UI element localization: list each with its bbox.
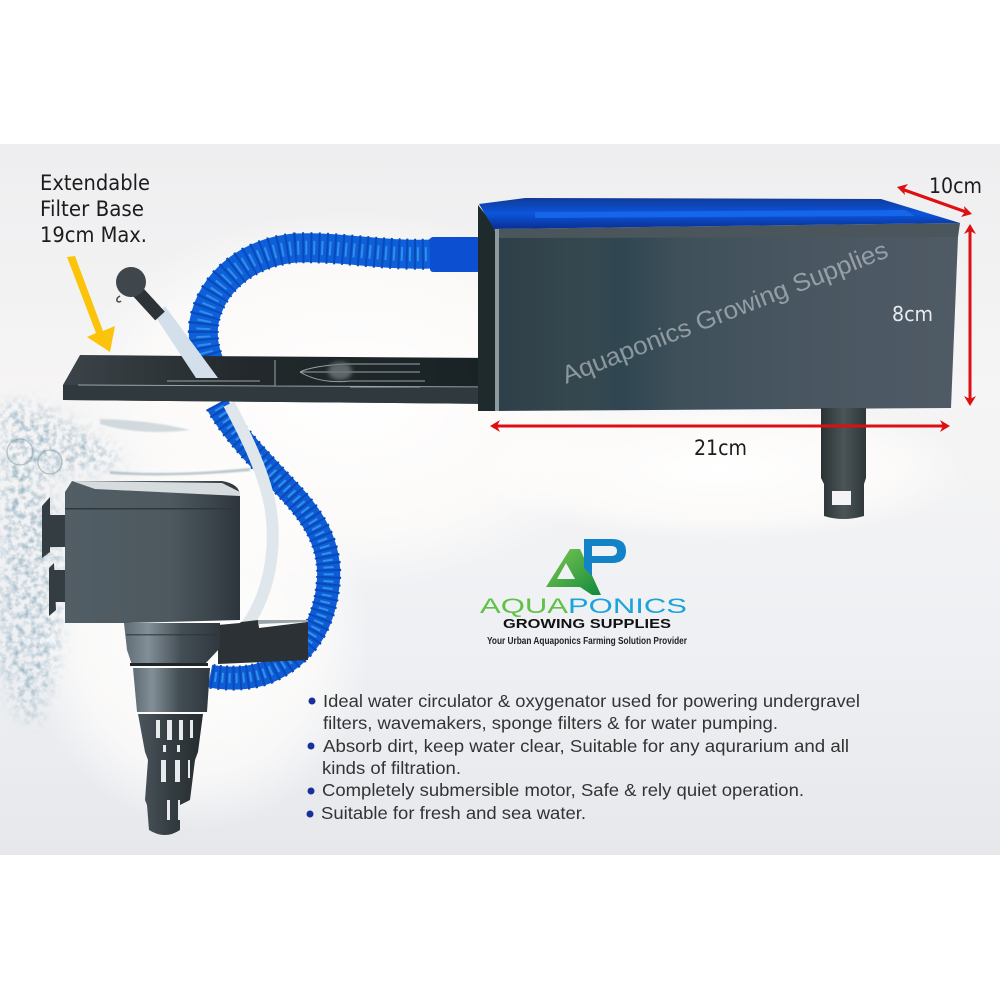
- hose connector: [430, 237, 480, 272]
- suction cups: [42, 497, 68, 616]
- pump body: [65, 481, 240, 623]
- bullet 2: kinds of filtration.: [322, 758, 461, 778]
- filter box: [478, 198, 960, 411]
- pump side outlet: [218, 620, 308, 664]
- pump collar: [133, 668, 210, 712]
- logo mark P: [584, 539, 626, 576]
- blue lid top: [479, 198, 960, 229]
- upper white air tube: [155, 306, 218, 378]
- outlet stem: [821, 408, 866, 519]
- background panel: [0, 144, 1000, 855]
- water splash and bubbles: [0, 404, 250, 725]
- bullet 1: Ideal water circulator & oxygenator used for powering undergravel: [323, 691, 860, 711]
- box lid rim: [494, 223, 960, 238]
- bullet 1: filters, wavemakers, sponge filters & for water pumping.: [323, 713, 778, 733]
- label: extendable filter base: 19cm Max.: [40, 223, 147, 247]
- lower white air tube: [229, 404, 273, 625]
- lower corrugated hose: [210, 404, 329, 678]
- logo: [480, 539, 687, 647]
- bullet 2: [308, 736, 849, 778]
- filter base tray: [63, 355, 500, 404]
- dimension arrow: height: [964, 224, 976, 406]
- dimension arrow: depth: [897, 184, 972, 217]
- submersible pump: [42, 481, 308, 835]
- label: extendable filter base: Filter Base: [40, 197, 144, 221]
- dimension: 21cm label: 21cm: [694, 436, 747, 460]
- dimension: 10cm label: 10cm: [929, 174, 982, 198]
- label: extendable filter base: [40, 171, 150, 247]
- logo mark A: [546, 549, 601, 595]
- box front face: [497, 237, 958, 411]
- bullet 2: Absorb dirt, keep water clear, Suitable for any aqurarium and all: [323, 736, 849, 756]
- dimension arrow: width: [490, 420, 950, 432]
- upper corrugated hose: [203, 248, 432, 376]
- air valve nozzle: [116, 267, 160, 316]
- box side wall: [478, 205, 497, 411]
- icon: yellow arrow: [67, 256, 115, 352]
- logo tagline: Your Urban Aquaponics Farming Solution Provider: [487, 636, 687, 647]
- pump neck: [124, 623, 220, 665]
- watermark: Aquaponics Growing Supplies: [558, 236, 892, 390]
- logo wordmark: AQUA PONICS: [480, 595, 687, 618]
- label: extendable filter base: Extendable: [40, 171, 150, 195]
- dimension: 8cm label: 8cm: [892, 302, 933, 326]
- intake strainer: [138, 714, 203, 835]
- bullet 1: [308, 691, 860, 733]
- bullet 4: Suitable for fresh and sea water.: [321, 803, 586, 823]
- bullet 3: Completely submersible motor, Safe & rely quiet operation.: [322, 780, 804, 800]
- feature bullet list: [306, 691, 860, 823]
- logo subtitle: GROWING SUPPLIES: [503, 617, 671, 631]
